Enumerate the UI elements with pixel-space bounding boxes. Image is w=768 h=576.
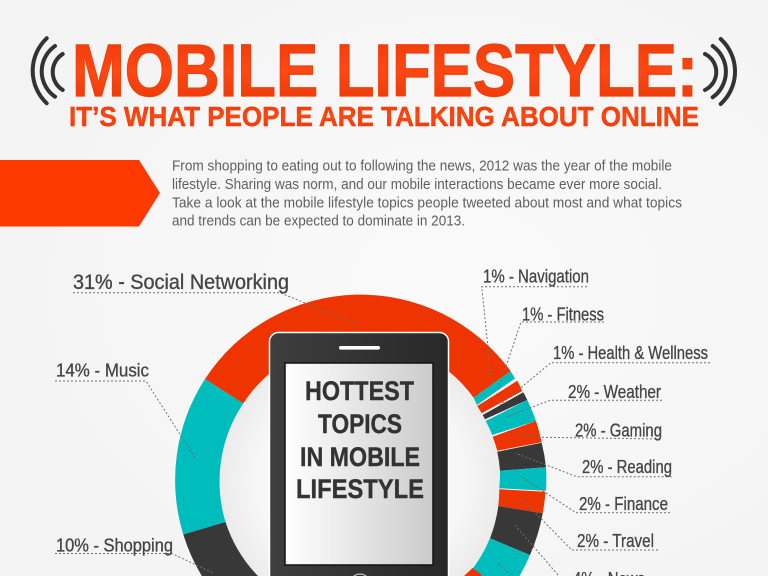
intro text block: Take a look at the mobile lifestyle topics people tweeted about most and what topics xyxy=(172,194,682,212)
icon: right signal waves xyxy=(705,39,735,104)
segment: news 4% xyxy=(490,506,543,555)
intro text block: lifestyle. Sharing was norm, and our mobile interactions became ever more social. xyxy=(172,176,662,193)
segment: teal lower xyxy=(468,538,530,576)
phone home button xyxy=(350,574,370,576)
label: shopping: 10% - Shopping xyxy=(56,536,173,556)
phone heading: TOPICS xyxy=(318,409,402,439)
segment: red lower xyxy=(462,568,482,576)
segment: fitness 1% xyxy=(477,381,522,413)
phone screen xyxy=(285,363,433,565)
segment: health and wellness 1% xyxy=(483,392,527,419)
label: travel: 2% - Travel xyxy=(577,531,654,551)
label: navigation: 1% - Navigation xyxy=(483,266,589,286)
segment: weather 2% xyxy=(486,400,536,435)
inner disc xyxy=(218,338,502,576)
intro text block: From shopping to eating out to following the news, 2012 was the year of the mobile xyxy=(172,158,672,174)
phone heading: HOTTEST xyxy=(305,376,414,406)
phone heading: IN MOBILE xyxy=(300,442,420,472)
label: reading: 2% - Reading xyxy=(582,457,672,477)
leader lines xyxy=(55,287,710,575)
label: health and wellness: 1% - Health & Wellness xyxy=(553,343,708,363)
label: music: 14% - Music xyxy=(56,360,149,380)
label: weather: 2% - Weather xyxy=(568,382,661,402)
phone heading xyxy=(296,376,424,504)
label: fitness: 1% - Fitness xyxy=(522,304,604,324)
phone xyxy=(270,332,448,576)
arrow banner xyxy=(0,160,160,226)
segment: social networking 31% xyxy=(205,295,511,404)
segment: shopping 10% xyxy=(183,522,270,576)
segment: reading 2% xyxy=(497,443,546,471)
segment: navigation 1% xyxy=(474,371,515,405)
phone speaker xyxy=(339,346,380,350)
segment: music 14% xyxy=(175,379,243,534)
segment: finance 2% xyxy=(499,467,546,491)
intro text block: and trends can be expected to dominate in 2013. xyxy=(172,212,465,230)
subtitle: IT’S WHAT PEOPLE ARE TALKING ABOUT ONLINE xyxy=(69,101,699,132)
donut chart xyxy=(175,295,546,576)
label: gaming: 2% - Gaming xyxy=(575,420,662,440)
label: social networking: 31% - Social Networking xyxy=(73,271,289,294)
phone body xyxy=(270,332,448,576)
segment: gaming 2% xyxy=(493,421,542,451)
segment: travel 2% xyxy=(498,489,546,513)
icon: left signal waves xyxy=(33,38,63,103)
intro text block xyxy=(172,158,682,230)
phone heading: LIFESTYLE xyxy=(296,474,424,504)
label: finance: 2% - Finance xyxy=(579,494,668,514)
